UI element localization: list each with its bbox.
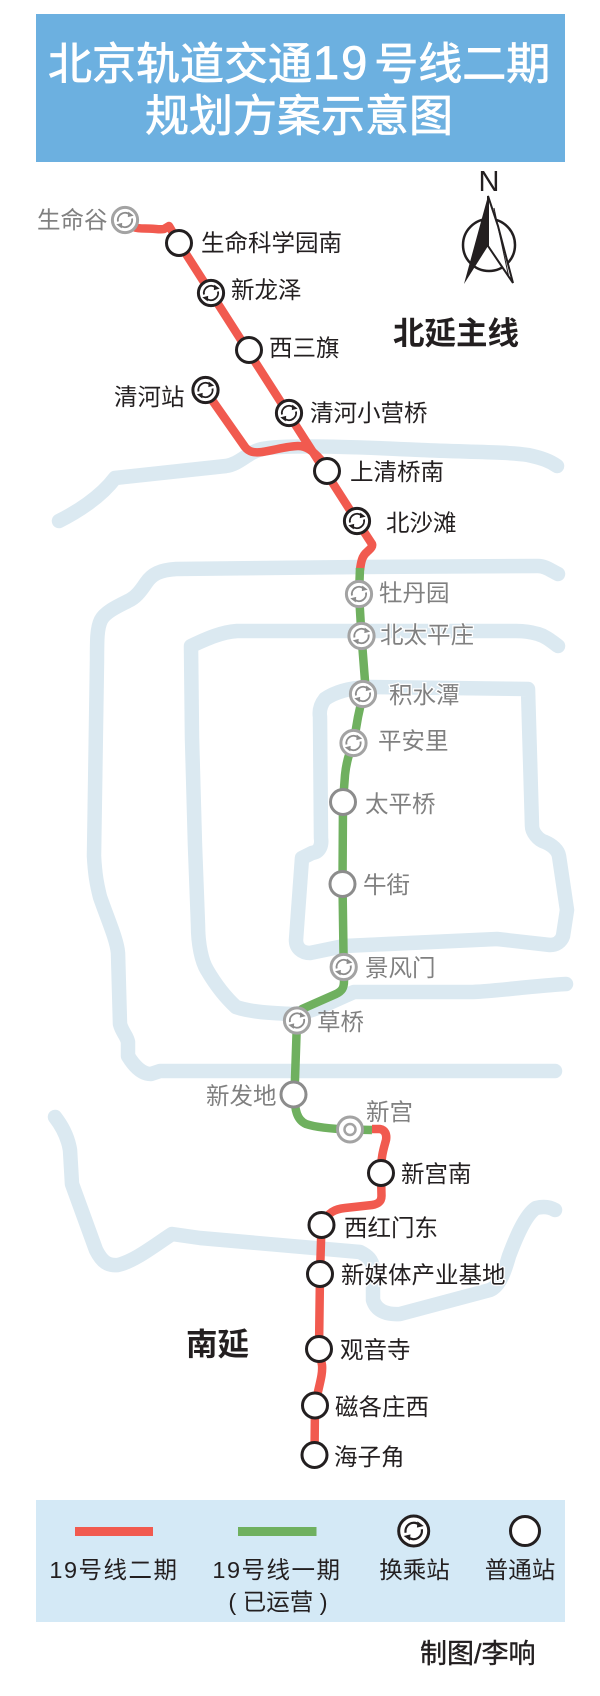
legend: interchange station (379, 1516, 450, 1583)
base map: roads and rivers (55, 446, 567, 1314)
station: 平安里 (341, 728, 448, 756)
station: 观音寺: 观音寺 (340, 1337, 410, 1363)
legend: interchange station: 换乘站 (379, 1557, 450, 1583)
station: 上清桥南: 上清桥南 (350, 459, 444, 485)
legend: regular station (485, 1516, 555, 1583)
station: 牛街 (330, 872, 410, 898)
station: 西三旗 (236, 335, 340, 362)
heading: north extension: 北延主线 (393, 315, 519, 351)
legend: regular station: 普通站 (485, 1557, 555, 1583)
compass: north arrow: N (479, 166, 499, 198)
station: 积水潭 (350, 681, 460, 708)
station: 新龙泽 (198, 277, 302, 306)
line: phase 2 south extension (314, 1129, 386, 1455)
station: 清河站: 清河站 (114, 384, 184, 410)
station: 海子角 (302, 1442, 404, 1470)
station: 北太平庄: 北太平庄 (380, 622, 474, 648)
station: 新宫 (338, 1099, 413, 1142)
station: 草桥: 草桥 (317, 1009, 364, 1035)
station: 新宫: 新宫 (366, 1099, 413, 1125)
station: 生命谷: 生命谷 (37, 207, 108, 233)
station: 西三旗: 西三旗 (269, 335, 340, 361)
compass: north arrow (463, 166, 515, 284)
station: 北沙滩: 北沙滩 (386, 510, 456, 536)
credit: 制图/李响 (420, 1639, 536, 1669)
line: phase 2 north extension main (124, 220, 372, 570)
title text: 北京轨道交通19号线二期 (48, 36, 550, 89)
station: 新龙泽: 新龙泽 (231, 277, 302, 303)
station: 太平桥: 太平桥 (365, 791, 436, 817)
station: 太平桥 (330, 790, 436, 817)
title banner (36, 14, 565, 162)
station: 新发地 (206, 1082, 306, 1109)
station: 景风门: 景风门 (365, 955, 436, 981)
station: 草桥 (284, 1008, 364, 1035)
station: 西红门东 (309, 1212, 438, 1241)
legend: phase 1: ( 已运营 ) (228, 1589, 328, 1615)
station: 新宫南: 新宫南 (401, 1161, 472, 1187)
station: 西红门东: 西红门东 (344, 1215, 438, 1241)
heading: south extension: 南延 (186, 1326, 249, 1362)
station: 平安里: 平安里 (378, 728, 448, 754)
line: phase 2 Qinghe branch (205, 390, 321, 460)
station: 景风门 (331, 954, 436, 981)
station: 牡丹园 (346, 580, 450, 607)
station: 新发地: 新发地 (206, 1083, 276, 1109)
title banner: 规划方案示意图 (145, 92, 453, 141)
legend: phase 2 (49, 1527, 179, 1583)
legend: phase 1: 19号线一期 (212, 1557, 342, 1583)
station: 海子角: 海子角 (334, 1444, 404, 1470)
station: 清河小营桥: 清河小营桥 (310, 400, 428, 426)
legend panel (36, 1500, 565, 1622)
station: 磁各庄西: 磁各庄西 (335, 1394, 429, 1420)
station: 观音寺 (306, 1336, 410, 1363)
station: 生命科学园南: 生命科学园南 (201, 230, 342, 256)
station: 新媒体产业基地: 新媒体产业基地 (341, 1262, 506, 1288)
line: phase 1 operating section (294, 568, 372, 1130)
station: 牡丹园: 牡丹园 (379, 580, 450, 606)
station: 积水潭: 积水潭 (389, 682, 460, 708)
legend: phase 1 (212, 1527, 342, 1615)
station: 牛街: 牛街 (363, 872, 410, 898)
station: 北沙滩 (344, 508, 456, 536)
station: 新宫南 (368, 1160, 472, 1187)
legend: phase 2: 19号线二期 (49, 1557, 179, 1583)
station: 清河站 (114, 377, 218, 410)
